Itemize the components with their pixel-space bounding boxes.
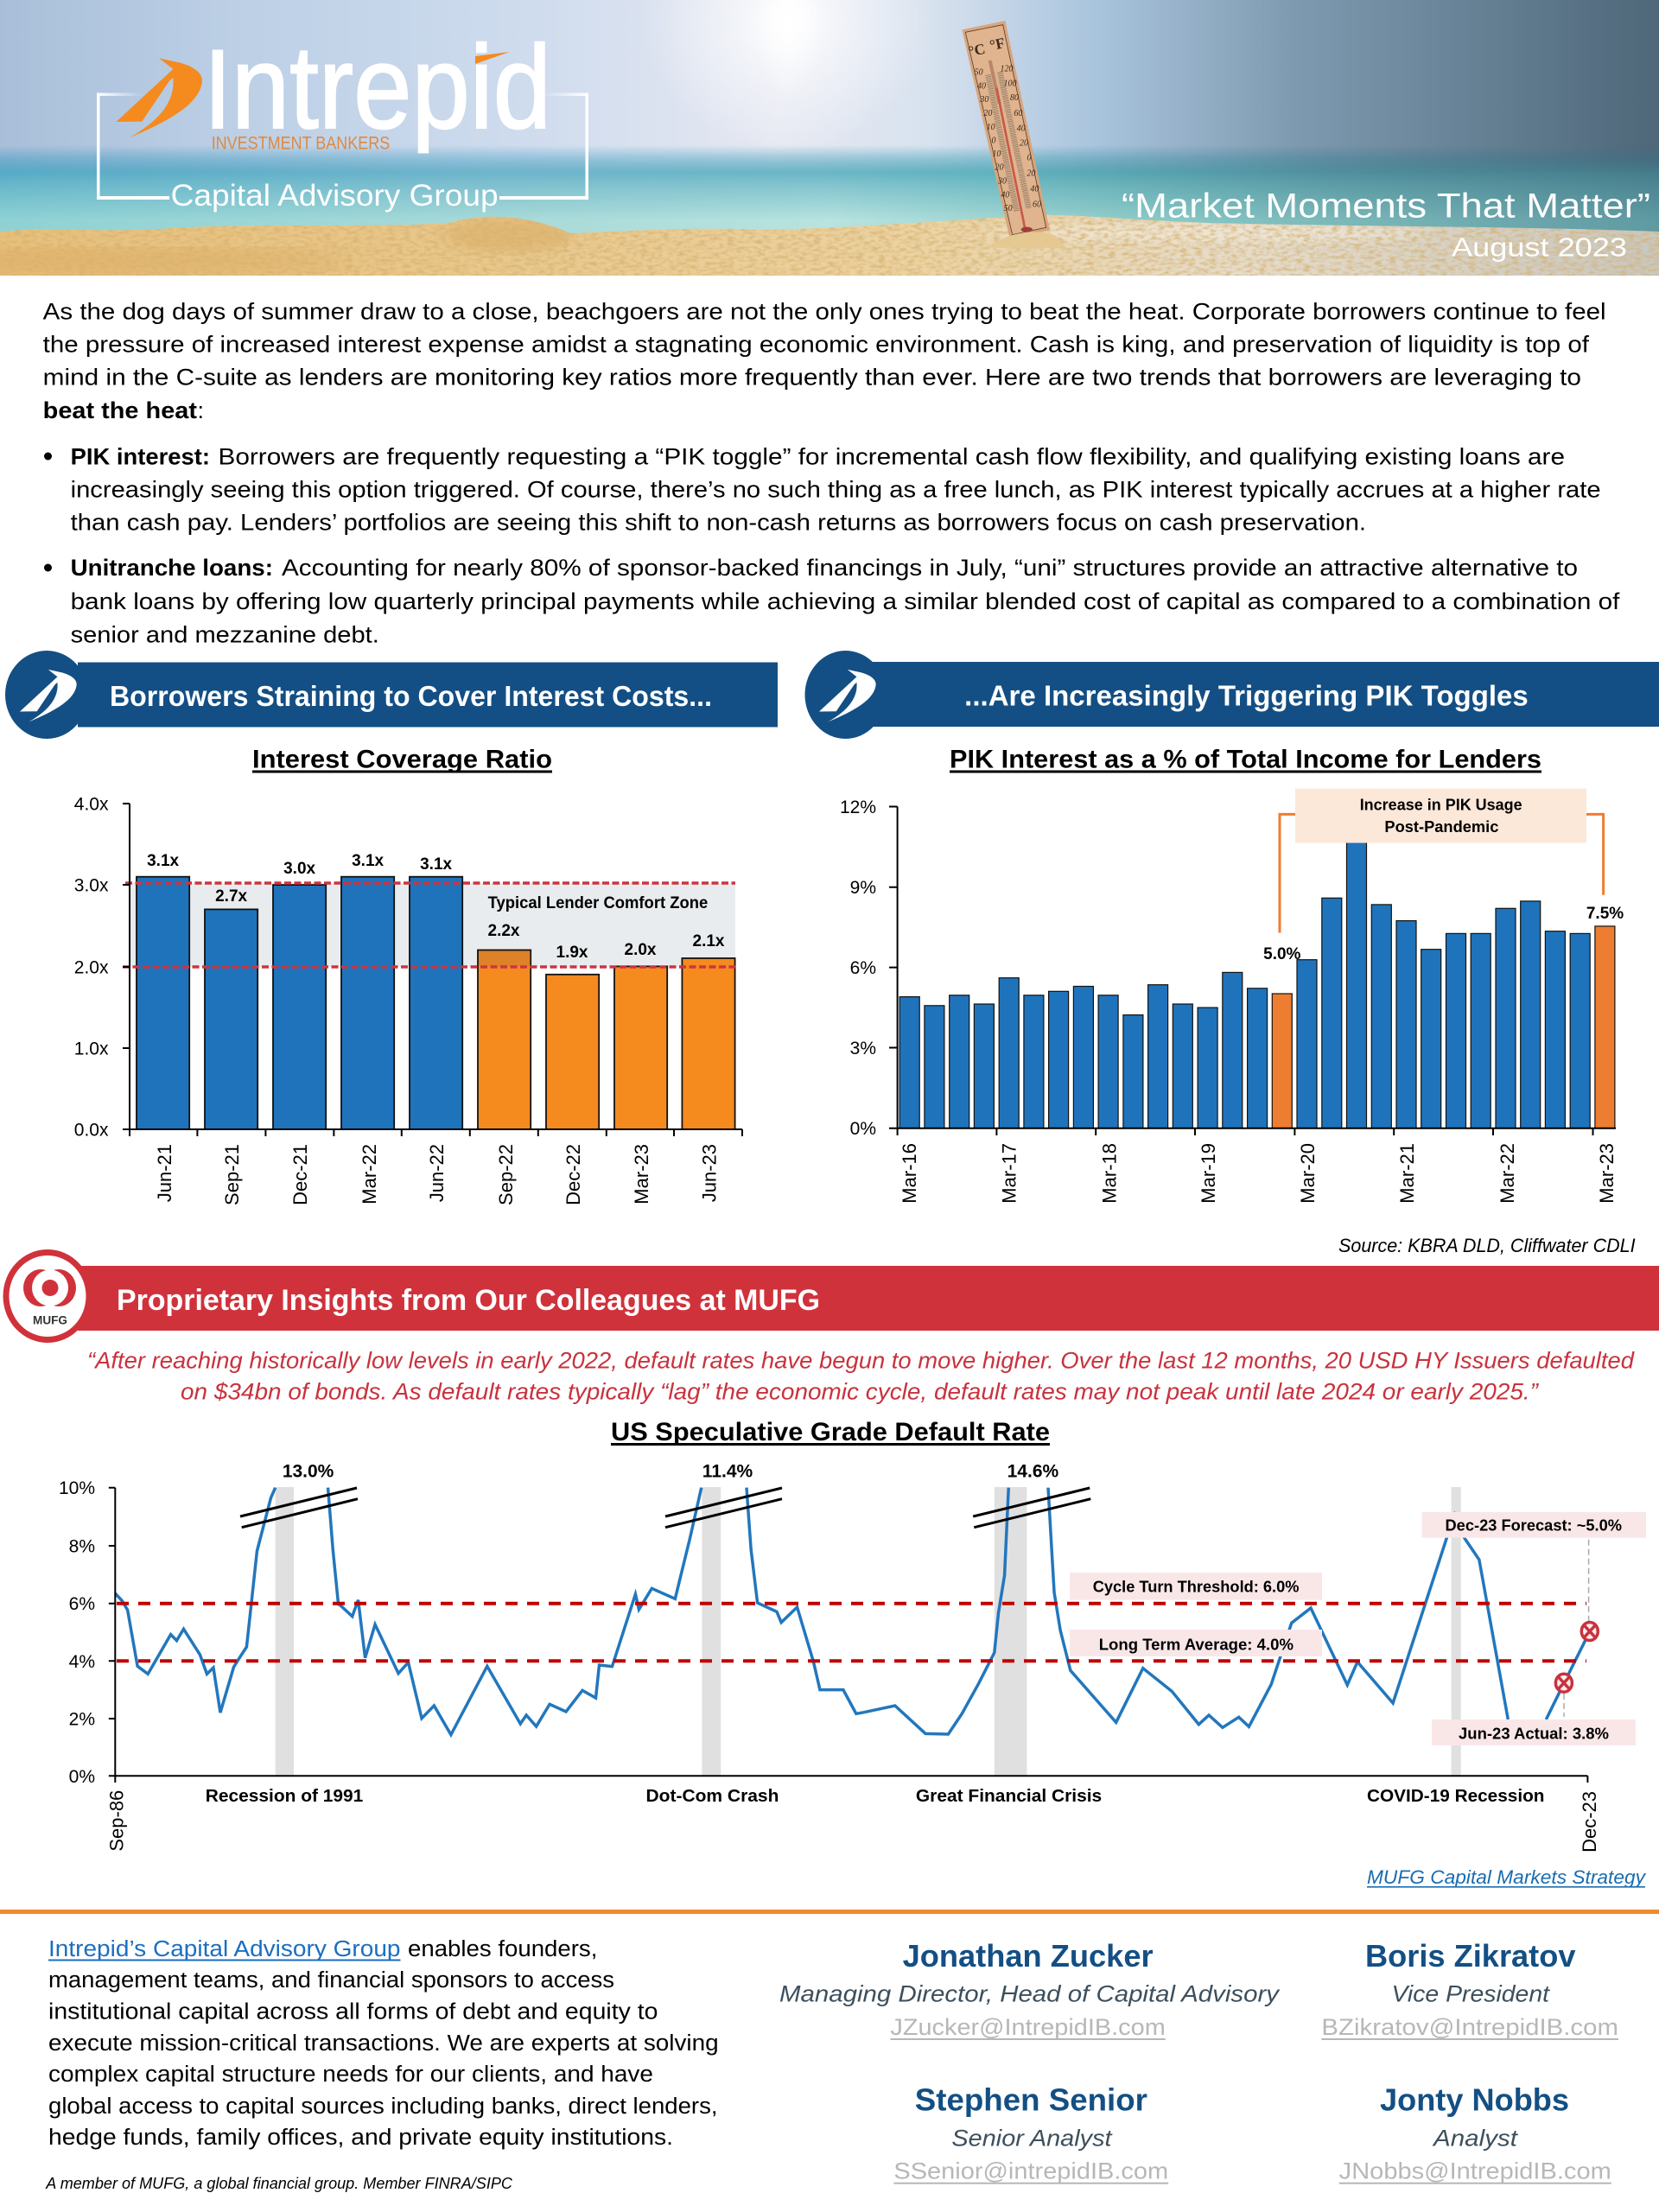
contact: Jonathan Zucker xyxy=(779,1938,1281,2040)
contact: Boris Zikratov: Boris Zikratov xyxy=(1365,1938,1576,1974)
intro paragraph xyxy=(43,298,1606,423)
line chart: US speculative grade default rate: 4% xyxy=(69,1652,95,1672)
banner heading: Proprietary Insights from Our Colleagues at MUFG xyxy=(117,1284,820,1317)
bullet: Unitranche loans: Accounting for nearly 80% of sponsor-backed financings in July, “uni” structures provide an attractive alternative to xyxy=(282,555,1578,581)
icon: thermometer: 50 xyxy=(975,68,983,78)
bar chart: interest coverage ratio: Sep-22 xyxy=(495,1144,517,1205)
chart title: default rate: US Speculative Grade Default Rate xyxy=(611,1418,1050,1446)
recession labels: Dot-Com Crash xyxy=(646,1787,779,1806)
icon: thermometer: 40 xyxy=(1001,191,1009,200)
callout: increase in PIK usage xyxy=(1295,788,1586,843)
line chart: US speculative grade default rate: Sep-86 xyxy=(105,1790,127,1852)
bar chart: PIK interest share: Mar-17 xyxy=(998,1143,1020,1204)
about text block: management teams, and financial sponsors to access xyxy=(48,1968,614,1993)
chart title: PIK interest: PIK Interest as a % of Total Income for Lenders xyxy=(950,745,1541,773)
logo tagline: INVESTMENT BANKERS xyxy=(212,133,390,153)
annotation: Jun-23 actual: Jun-23 Actual: 3.8% xyxy=(1459,1724,1609,1742)
bar chart: interest coverage ratio: Dec-21 xyxy=(289,1144,311,1205)
logo wordmark: Intrepid xyxy=(204,22,551,154)
intro paragraph: beat the heat xyxy=(43,397,197,423)
bar chart: PIK interest share: 9% xyxy=(850,878,876,898)
contact: Stephen Senior: Stephen Senior xyxy=(915,2082,1147,2118)
quote: on $34bn of bonds. As default rates typically “lag” the economic cycle, default rates may not peak until late 2024 or early 2025.” xyxy=(181,1379,1539,1405)
bar chart: interest coverage ratio: 2.0x xyxy=(625,941,657,959)
bar chart: interest coverage ratio: 2.2x xyxy=(488,922,520,940)
logo: Intrepid Capital Advisory Group xyxy=(97,22,588,213)
icon: thermometer: 30 xyxy=(979,95,988,105)
bar chart: interest coverage ratio: 4.0x xyxy=(74,795,109,814)
intro paragraph: : xyxy=(197,397,204,423)
bullet: Unitranche loans: bank loans by offering low quarterly principal payments while achieving a similar blended cost of capital as compared to a combination of xyxy=(71,588,1620,614)
icon: MUFG logo xyxy=(23,1269,76,1327)
bar chart: interest coverage ratio: 2.1x xyxy=(693,932,725,950)
marker: Dec-23 forecast xyxy=(1581,1623,1598,1640)
bar chart: PIK interest share: 12% xyxy=(840,798,876,817)
contact: Boris Zikratov: Vice President xyxy=(1391,1981,1551,2007)
quote xyxy=(87,1348,1635,1405)
header banner: beach photograph xyxy=(0,0,1659,276)
bar chart: PIK interest share: 0% xyxy=(850,1119,876,1139)
icon: thermometer xyxy=(962,21,1065,248)
bar chart: PIK interest share: 6% xyxy=(850,958,876,978)
peak labels xyxy=(283,1461,1058,1481)
banner heading: Borrowers Straining to Cover Interest Costs... xyxy=(110,680,712,712)
marker: Jun-23 actual xyxy=(1555,1674,1572,1692)
logo bird mark xyxy=(116,52,202,137)
bar chart: PIK interest share: Mar-19 xyxy=(1198,1143,1219,1204)
about text block: enables founders, xyxy=(408,1937,597,1961)
icon: thermometer: 50 xyxy=(1004,204,1013,213)
annotation: long term average xyxy=(1070,1630,1322,1656)
about text block: complex capital structure needs for our clients, and have xyxy=(48,2063,653,2087)
icon: thermometer: 0 xyxy=(991,137,995,146)
annotation: Jun-23 actual xyxy=(1432,1719,1636,1745)
group name: Capital Advisory Group xyxy=(171,179,499,213)
icon: MUFG logo: MUFG xyxy=(33,1313,67,1327)
icon: thermometer: °F xyxy=(988,35,1007,54)
bar chart: interest coverage ratio: 3.0x xyxy=(283,860,316,878)
icon: thermometer: 60 xyxy=(1014,109,1022,118)
bar chart: PIK interest share: Mar-16 xyxy=(899,1143,920,1204)
contact: Jonty Nobbs: JNobbs@IntrepidIB.com xyxy=(1339,2158,1611,2184)
bar chart: interest coverage ratio: Jun-21 xyxy=(154,1144,175,1202)
bar chart: interest coverage ratio: 0.0x xyxy=(74,1120,109,1141)
bar chart: PIK interest share: 7.5% xyxy=(1586,905,1624,923)
bar chart: PIK interest share: Mar-22 xyxy=(1497,1143,1518,1204)
contact: Stephen Senior: Senior Analyst xyxy=(951,2125,1113,2151)
bar chart: PIK interest share: 3% xyxy=(850,1039,876,1058)
bar chart: PIK interest share xyxy=(840,788,1624,1204)
axis break marks xyxy=(240,1488,1090,1528)
contact: Jonathan Zucker: Managing Director, Head of Capital Advisory xyxy=(779,1981,1281,2007)
disclaimer: A member of MUFG, a global financial group. Member FINRA/SIPC xyxy=(45,2175,513,2192)
section banner: MUFG insights xyxy=(3,1249,1659,1343)
quote: “After reaching historically low levels in early 2022, default rates have begun to move higher. Over the last 12 months, 20 USD HY Issuers defaulted xyxy=(87,1348,1635,1374)
section banner: PIK toggles xyxy=(805,651,1659,739)
bar chart: interest coverage ratio: 1.9x xyxy=(556,944,588,962)
bar chart: interest coverage ratio: Typical Lender Comfort Zone xyxy=(488,894,708,912)
annotation: cycle turn threshold xyxy=(1070,1573,1322,1600)
callout: increase in PIK usage: Post-Pandemic xyxy=(1384,818,1498,836)
recession labels: Recession of 1991 xyxy=(206,1787,363,1806)
bar chart: interest coverage ratio: 3.1x xyxy=(420,855,453,874)
contact: Jonathan Zucker: Jonathan Zucker xyxy=(903,1938,1154,1974)
intro paragraph: As the dog days of summer draw to a close, beachgoers are not the only ones trying to beat the heat. Corporate borrowers continue to feel xyxy=(43,298,1606,324)
bar chart: PIK interest share: Mar-18 xyxy=(1099,1143,1120,1204)
recession labels: Great Financial Crisis xyxy=(916,1787,1102,1806)
bullet: Unitranche loans xyxy=(44,555,1620,647)
annotation: Dec-23 forecast xyxy=(1422,1512,1646,1538)
line chart: US speculative grade default rate: 8% xyxy=(69,1536,95,1557)
bullet: PIK interest: PIK interest: xyxy=(71,443,210,469)
contact: Jonty Nobbs: Jonty Nobbs xyxy=(1380,2082,1569,2118)
bar chart: interest coverage ratio: Mar-23 xyxy=(631,1144,652,1205)
line chart: US speculative grade default rate xyxy=(59,1461,1646,1853)
icon: thermometer: 10 xyxy=(987,123,995,132)
bar chart: interest coverage ratio: Jun-22 xyxy=(426,1144,448,1202)
bullet: PIK interest: Borrowers are frequently requesting a “PIK toggle” for incremental cash flow flexibility, and qualifying existing loans are xyxy=(218,443,1565,469)
bullet: Unitranche loans: Unitranche loans: xyxy=(71,555,273,581)
icon: thermometer: 20 xyxy=(1027,168,1035,178)
icon: thermometer: 40 xyxy=(1030,185,1039,194)
about text block: hedge funds, family offices, and private equity institutions. xyxy=(48,2126,673,2150)
icon: bird mark xyxy=(819,665,876,722)
bar chart: interest coverage ratio: Dec-22 xyxy=(563,1144,584,1205)
bar chart: interest coverage ratio: 2.0x xyxy=(74,957,109,978)
bar chart: interest coverage ratio: Sep-21 xyxy=(221,1144,243,1205)
bar chart: PIK interest share: Mar-23 xyxy=(1596,1143,1618,1204)
bullet: PIK interest xyxy=(44,443,1601,535)
bar chart: interest coverage ratio: 1.0x xyxy=(74,1039,109,1059)
bar chart: interest coverage ratio: Jun-23 xyxy=(699,1144,721,1202)
bar chart: PIK interest share: 5.0% xyxy=(1263,945,1301,963)
contact: Jonathan Zucker: JZucker@IntrepidIB.com xyxy=(890,2014,1166,2040)
line chart: US speculative grade default rate: 2% xyxy=(69,1709,95,1730)
contact: Boris Zikratov: BZikratov@IntrepidIB.com xyxy=(1321,2014,1618,2040)
icon: thermometer: 0 xyxy=(1027,153,1031,162)
annotation: Dec-23 forecast: Dec-23 Forecast: ~5.0% xyxy=(1445,1516,1622,1535)
banner heading: ...Are Increasingly Triggering PIK Toggles xyxy=(964,679,1529,712)
icon: bird mark xyxy=(20,665,77,722)
about text block: global access to capital sources including banks, direct lenders, xyxy=(48,2094,718,2119)
newsletter date: August 2023 xyxy=(1452,232,1627,263)
icon: thermometer: 100 xyxy=(1004,79,1016,88)
line chart: US speculative grade default rate: 10% xyxy=(59,1478,95,1498)
bar chart: PIK interest share: Mar-20 xyxy=(1297,1143,1319,1204)
source link: MUFG Capital Markets Strategy xyxy=(1367,1866,1647,1888)
source note: Source: KBRA DLD, Cliffwater CDLI xyxy=(1338,1235,1636,1256)
icon: thermometer: 20 xyxy=(983,109,992,118)
recession labels xyxy=(206,1787,1544,1806)
contact: Boris Zikratov xyxy=(1321,1938,1618,2040)
bullet: PIK interest: increasingly seeing this option triggered. Of course, there’s no such thing as a free lunch, as PIK interest typically accrues at a higher rate xyxy=(71,476,1601,502)
recession labels: COVID-19 Recession xyxy=(1367,1787,1545,1806)
newsletter title: “Market Moments That Matter” xyxy=(1122,188,1650,226)
contact: Jonty Nobbs: Analyst xyxy=(1432,2125,1519,2151)
contact: Stephen Senior xyxy=(893,2082,1168,2184)
line chart: US speculative grade default rate: 6% xyxy=(69,1594,95,1614)
peak labels: 11.4% xyxy=(702,1461,753,1481)
annotation: long term average: Long Term Average: 4.0% xyxy=(1099,1635,1294,1653)
peak labels: 14.6% xyxy=(1007,1461,1058,1481)
icon: thermometer: 20 xyxy=(995,163,1004,173)
intro paragraph: mind in the C-suite as lenders are monitoring key ratios more frequently than ever. Here are two trends that borrowers are leveraging to xyxy=(43,365,1581,391)
callout bracket xyxy=(1280,814,1604,933)
icon: thermometer: 30 xyxy=(997,177,1007,187)
bar chart: interest coverage ratio: 2.7x xyxy=(215,887,248,906)
logo accent xyxy=(475,52,510,64)
bar chart: interest coverage ratio: 3.0x xyxy=(74,876,109,895)
icon: thermometer: 40 xyxy=(977,82,986,92)
callout: increase in PIK usage: Increase in PIK Usage xyxy=(1360,797,1522,814)
peak labels: 13.0% xyxy=(283,1461,334,1481)
chart title: interest coverage ratio: Interest Coverage Ratio xyxy=(252,745,552,773)
line chart: US speculative grade default rate: 0% xyxy=(69,1767,95,1787)
bar chart: interest coverage ratio: 3.1x xyxy=(147,852,180,870)
bar chart: interest coverage ratio xyxy=(74,795,742,1205)
bar chart: interest coverage ratio: 3.1x xyxy=(352,852,385,870)
annotation: cycle turn threshold: Cycle Turn Threshold: 6.0% xyxy=(1093,1578,1300,1596)
contact: Stephen Senior: SSenior@intrepidIB.com xyxy=(893,2158,1168,2184)
about text block xyxy=(48,1937,719,2150)
icon: thermometer: 10 xyxy=(992,149,1001,159)
icon: thermometer: 20 xyxy=(1020,138,1028,148)
bullet: PIK interest: than cash pay. Lenders’ portfolios are seeing this shift to non-cash returns as borrowers focus on cash preservation. xyxy=(71,509,1366,535)
section banner: borrowers straining xyxy=(5,651,778,739)
icon: thermometer: 40 xyxy=(1017,124,1026,134)
icon: thermometer: 120 xyxy=(1001,65,1013,74)
contact: Jonty Nobbs xyxy=(1339,2082,1611,2184)
about text block: Intrepid’s Capital Advisory Group xyxy=(48,1937,400,1961)
icon: thermometer: °C xyxy=(967,41,987,60)
icon: thermometer: 80 xyxy=(1010,93,1019,103)
bullet: Unitranche loans: senior and mezzanine debt. xyxy=(71,621,379,647)
line chart: US speculative grade default rate: Dec-23 xyxy=(1579,1791,1600,1853)
about text block: institutional capital across all forms of debt and equity to xyxy=(48,2000,658,2024)
intro paragraph: the pressure of increased interest expense amidst a stagnating economic environment. Cash is king, and preservation of liquidity is top of xyxy=(43,331,1590,357)
bar chart: PIK interest share: Mar-21 xyxy=(1396,1143,1418,1204)
icon: thermometer: 60 xyxy=(1033,200,1041,209)
bar chart: interest coverage ratio: Mar-22 xyxy=(359,1144,380,1205)
about text block: execute mission-critical transactions. We are experts at solving xyxy=(48,2031,719,2056)
